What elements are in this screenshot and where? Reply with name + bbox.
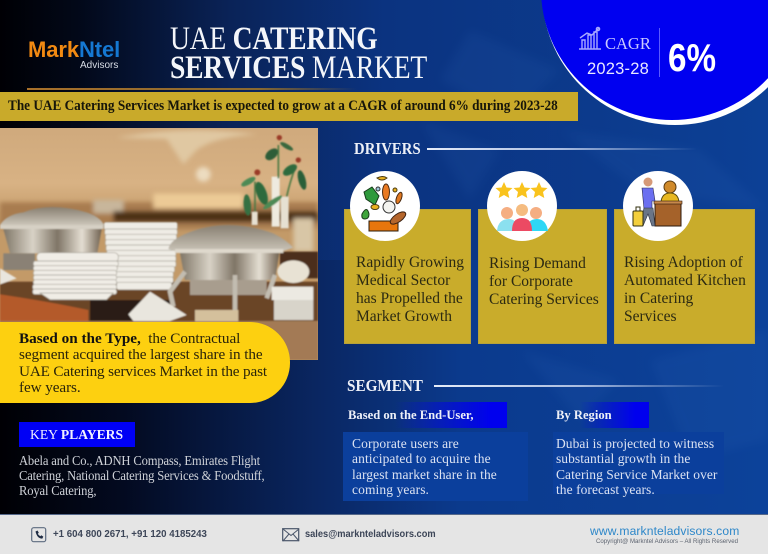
title: UAE CATERING	[170, 21, 377, 57]
callout text: UAE Catering services Market in the past	[19, 363, 267, 380]
key players list: Abela and Co., ADNH Compass, Emirates Flight	[19, 454, 260, 469]
driver 1 text: Market Growth	[356, 308, 452, 325]
region text: substantial growth in the	[556, 451, 690, 466]
driver 1 text: Rapidly Growing	[356, 254, 464, 271]
summary banner	[0, 92, 578, 121]
driver 2 text: Catering Services	[489, 291, 599, 308]
driver 3 text: Automated Kitchen	[624, 272, 746, 289]
icon: email	[282, 528, 300, 542]
key players heading: KEY PLAYERS	[30, 427, 123, 442]
end-user text	[352, 436, 497, 497]
napkins and small plates	[0, 268, 313, 321]
callout text: segment acquired the largest share in the	[19, 346, 263, 363]
plants	[240, 135, 308, 228]
CAGR label: CAGR	[605, 34, 651, 53]
badge circle	[541, 0, 768, 125]
drivers rule	[427, 148, 697, 150]
end-user text: largest market share in the	[352, 467, 497, 482]
title	[170, 21, 427, 86]
driver 1 text: Medical Sector	[356, 272, 450, 289]
stacked plates back	[104, 222, 177, 290]
copyright: Copyright@ Markntel Advisors – All Rights Reserved	[596, 538, 738, 545]
email address: sales@marknteladvisors.com	[305, 529, 436, 540]
divider	[659, 28, 660, 77]
icon: phone	[31, 527, 46, 542]
callout text: few years.	[19, 379, 81, 396]
table	[0, 252, 318, 360]
icon: reception service	[623, 171, 693, 241]
key players list: Catering, National Catering Services & Foodstuff,	[19, 469, 265, 484]
driver 3 text: Services	[624, 308, 677, 325]
driver card 3	[614, 209, 755, 344]
divider under title	[27, 88, 357, 90]
driver 3 text: Rising Adoption of	[624, 254, 743, 271]
region text: Dubai is projected to witness	[556, 436, 714, 451]
icon: growth chart	[579, 27, 601, 49]
driver 3 text: in Catering	[624, 290, 693, 307]
icon: healthy food	[350, 171, 420, 241]
key players list: Royal Catering,	[19, 484, 96, 499]
driver 1 text	[356, 254, 464, 325]
logo	[28, 37, 120, 71]
chafing dish left	[0, 207, 104, 270]
CAGR badge	[542, 0, 768, 125]
photo: catering buffet	[0, 128, 318, 360]
icon: rated customers	[487, 171, 557, 241]
ceiling lamp	[117, 130, 257, 164]
end-user text: coming years.	[352, 482, 429, 497]
region heading: By Region	[556, 408, 612, 422]
region text: Catering Service Market over	[556, 467, 717, 482]
region panel	[553, 432, 724, 494]
website: www.marknteladvisors.com	[590, 524, 739, 538]
segment rule	[434, 385, 724, 387]
title: SERVICES MARKET	[170, 50, 427, 86]
CAGR period: 2023-28	[587, 60, 649, 78]
end-user text: Corporate users are	[352, 436, 459, 451]
logo subtitle: Advisors	[80, 60, 118, 71]
key players list	[19, 454, 265, 499]
driver 2 text	[489, 255, 599, 308]
drivers heading: DRIVERS	[354, 139, 421, 158]
driver 2 text: Rising Demand	[489, 255, 586, 272]
end-user panel	[343, 432, 528, 501]
callout text: Based on the Type, the Contractual	[19, 330, 240, 347]
region text: the forecast years.	[556, 482, 655, 497]
driver 1 text: has Propelled the	[356, 290, 463, 307]
driver 3 text	[624, 254, 746, 325]
region text	[556, 436, 718, 497]
region heading	[556, 402, 649, 428]
driver card 2	[478, 209, 607, 344]
stacked plates front	[33, 253, 118, 300]
type callout	[0, 322, 290, 403]
end-user heading: Based on the End-User,	[348, 408, 474, 422]
chafing dish right	[168, 225, 309, 310]
footer	[0, 514, 768, 554]
CAGR value: 6%	[668, 37, 716, 80]
callout text	[19, 330, 267, 396]
end-user text: anticipated to acquire the	[352, 451, 491, 466]
banner text: The UAE Catering Services Market is expected to grow at a CAGR of around 6% during 2023-28	[8, 98, 558, 114]
phone numbers: +1 604 800 2671, +91 120 4185243	[53, 529, 207, 540]
segment heading: SEGMENT	[347, 376, 423, 395]
logo wordmark: MarkNtel	[28, 37, 120, 62]
driver 2 text: for Corporate	[489, 273, 573, 290]
end-user heading	[347, 402, 507, 428]
driver card 1	[344, 209, 471, 344]
key players heading	[19, 422, 135, 447]
blurred background buffet	[0, 167, 318, 252]
